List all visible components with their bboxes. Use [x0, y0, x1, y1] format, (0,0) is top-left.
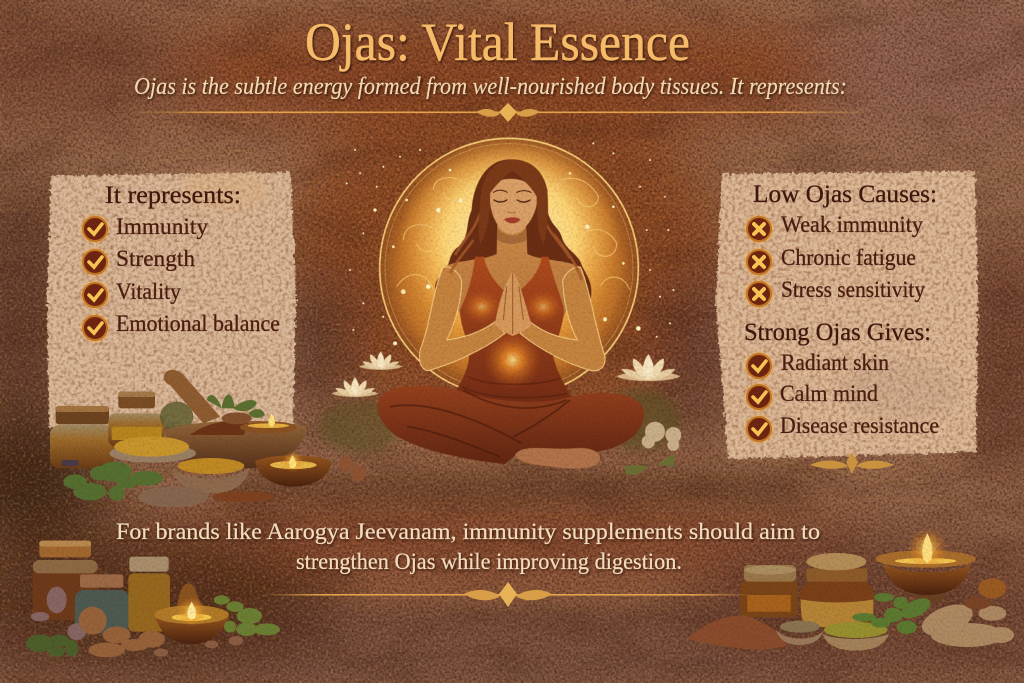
line 2: strengthen Ojas while improving digestion. — [296, 549, 682, 574]
amber jar — [33, 541, 98, 620]
green leaves — [26, 635, 78, 657]
hair side waves — [450, 213, 582, 280]
item: emotional balance: Emotional balance — [116, 311, 280, 336]
oil lamp with flame — [154, 583, 229, 644]
item: calm mind: Calm mind — [780, 381, 878, 406]
item: emotional balance — [83, 311, 280, 340]
praying hands — [495, 273, 532, 336]
shirt folds — [462, 377, 567, 398]
large jar — [801, 553, 873, 627]
front hair — [479, 159, 548, 245]
item: stress sensitivity — [747, 277, 925, 306]
closing statement — [116, 519, 820, 574]
neck shadow — [497, 227, 526, 244]
item: stress sensitivity: Stress sensitivity — [781, 277, 925, 302]
jar of golden oil — [108, 392, 164, 447]
mortar and pestle — [164, 370, 307, 468]
heading: Strong Ojas Gives: — [744, 319, 931, 346]
small bowl of turmeric — [173, 458, 249, 493]
jar with cork — [50, 406, 114, 468]
face — [489, 179, 537, 234]
mint leaves — [852, 593, 934, 634]
item: immunity: Immunity — [116, 214, 208, 239]
lavender sprigs — [31, 587, 86, 640]
item: strength: Strength — [116, 246, 195, 271]
fire bowl — [876, 528, 976, 602]
copper pot and spices — [964, 578, 1006, 609]
subtitle: Ojas is the subtle energy formed from well-nourished body tissues. It represents: — [134, 74, 847, 100]
item: weak immunity — [747, 212, 923, 241]
eyes, brows and nose — [493, 190, 531, 213]
props: bottom left jars and lamp — [26, 541, 280, 657]
props: left herbs, jars and bowls — [50, 370, 332, 507]
item: immunity — [83, 214, 208, 241]
lit oil lamp — [255, 451, 332, 487]
panel: right parchment — [716, 171, 978, 459]
herb leaves right of lamp — [214, 595, 280, 636]
honey jar — [128, 557, 170, 632]
trousers — [378, 386, 644, 464]
item: chronic fatigue: Chronic fatigue — [781, 245, 916, 270]
item: disease resistance: Disease resistance — [780, 413, 939, 438]
sparkles — [346, 142, 674, 345]
item: vitality: Vitality — [116, 279, 181, 304]
herb sprigs — [160, 402, 193, 432]
bottom divider with ornament — [262, 582, 752, 607]
title: Ojas: Vital Essence — [305, 12, 690, 72]
item: chronic fatigue — [747, 245, 916, 274]
item: radiant skin: Radiant skin — [781, 350, 889, 375]
list: it represents — [83, 182, 280, 340]
item: strength — [83, 246, 195, 274]
lotus flowers — [332, 351, 680, 397]
dried bark pile — [687, 616, 787, 650]
green herb leaves — [63, 462, 163, 501]
list: low ojas causes — [747, 181, 937, 306]
small leaves — [623, 453, 675, 475]
item: weak immunity: Weak immunity — [781, 212, 923, 237]
tank top — [457, 257, 572, 411]
panel: left parchment — [47, 170, 296, 428]
plate of golden grains — [109, 437, 196, 463]
item: radiant skin — [747, 350, 889, 378]
foot — [515, 448, 600, 469]
pebbles — [154, 636, 243, 657]
halo ring and mandala — [380, 138, 638, 397]
dried roots and walnuts — [79, 607, 165, 657]
line 1: For brands like Aarogya Jeevanam, immunity supplements should aim to — [116, 519, 820, 544]
ornament: below right panel — [810, 452, 894, 474]
flat stone and seeds — [138, 486, 275, 507]
item: vitality — [83, 279, 181, 307]
head glow — [400, 133, 620, 347]
right arm — [520, 267, 605, 371]
figure: meditating woman with golden halo — [320, 133, 681, 481]
hair back — [435, 159, 591, 302]
white blossoms — [642, 422, 681, 451]
heading: Low Ojas Causes: — [753, 181, 937, 208]
shallow bowl with grey spice — [776, 621, 824, 645]
props: bottom right jars, lamp and roots — [687, 528, 1014, 651]
chest energy glow — [461, 289, 502, 324]
neck and chest — [443, 223, 581, 317]
blue grey jar — [75, 574, 129, 633]
lips — [504, 217, 521, 223]
small jar — [740, 565, 798, 617]
ground greenery and glow — [320, 390, 680, 453]
item: calm mind — [747, 381, 878, 409]
left arm — [420, 267, 505, 371]
list: strong ojas gives — [744, 319, 939, 441]
halo fill — [380, 138, 638, 397]
top divider with ornament — [130, 103, 870, 122]
acorn stones — [339, 456, 366, 481]
heading: It represents: — [105, 182, 241, 209]
ginger roots — [918, 598, 1014, 647]
bowl of green seeds — [822, 622, 889, 651]
